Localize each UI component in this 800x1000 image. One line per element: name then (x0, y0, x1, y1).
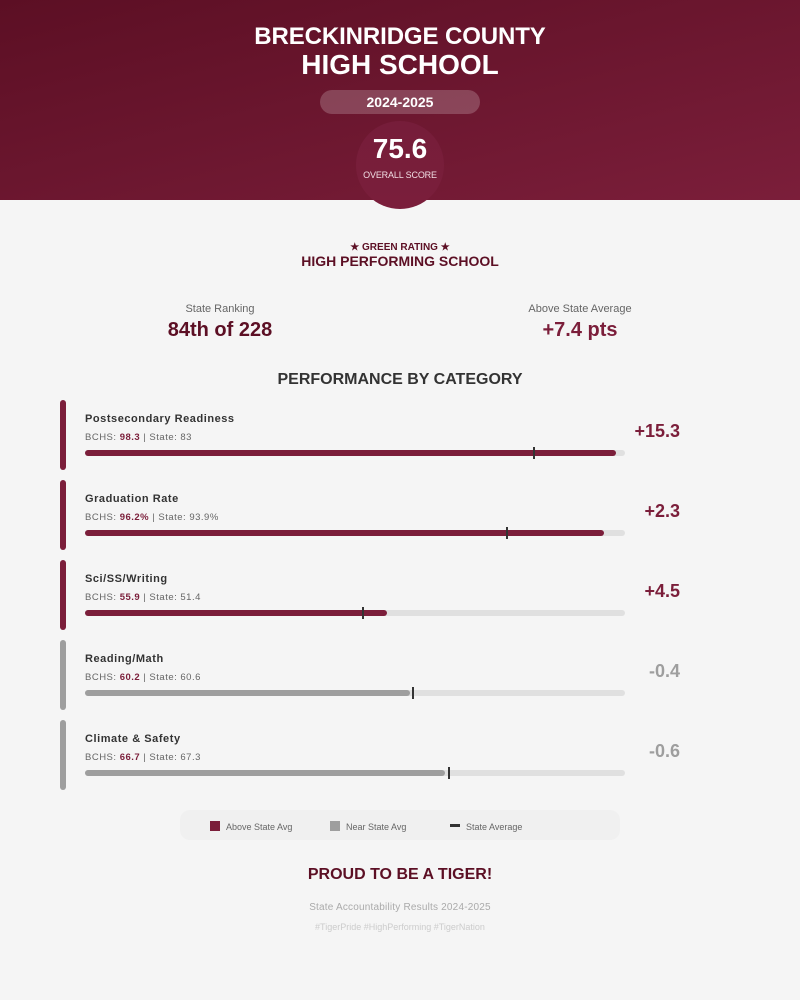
header banner (0, 0, 800, 200)
rating label: ★ GREEN RATING ★ (350, 242, 450, 253)
footer source: State Accountability Results 2024-2025 (309, 902, 491, 913)
category: Sci/SS/Writing: Sci/SS/Writing (85, 573, 168, 585)
category: Postsecondary Readiness: +15.3 (634, 421, 680, 441)
footer hashtags: #TigerPride #HighPerforming #TigerNation (315, 922, 485, 932)
score label: OVERALL SCORE (363, 170, 437, 180)
year badge (320, 90, 480, 114)
category: Graduation Rate: BCHS: 96.2% | State: 93.9% (85, 512, 219, 523)
section heading: PERFORMANCE BY CATEGORY (277, 371, 523, 388)
rating heading: HIGH PERFORMING SCHOOL (301, 253, 499, 269)
average label: Above State Average (528, 303, 632, 315)
category: Sci/SS/Writing (60, 560, 680, 630)
closing slogan: PROUD TO BE A TIGER! (308, 866, 492, 883)
average value: +7.4 pts (542, 319, 618, 341)
category: Postsecondary Readiness (60, 400, 680, 470)
overall score circle (356, 121, 444, 209)
category: Sci/SS/Writing: +4.5 (644, 581, 680, 601)
year badge: 2024-2025 (367, 94, 433, 110)
category: Graduation Rate: +2.3 (644, 501, 680, 521)
category: Climate & Safety: BCHS: 66.7 | State: 67.3 (85, 752, 201, 763)
category: Reading/Math: -0.4 (649, 661, 680, 681)
legend: near state avg: Near State Avg (346, 822, 406, 832)
category: Reading/Math: BCHS: 60.2 | State: 60.6 (85, 672, 201, 683)
category: Postsecondary Readiness: BCHS: 98.3 | State: 83 (85, 432, 192, 443)
category: Climate & Safety: Climate & Safety (85, 733, 181, 745)
category: Reading/Math: Reading/Math (85, 653, 164, 665)
category: Postsecondary Readiness: Postsecondary Readiness (85, 413, 235, 425)
stat: above state average (528, 303, 632, 341)
category: Climate & Safety: -0.6 (649, 741, 680, 761)
ranking label: State Ranking (185, 303, 255, 315)
ranking value: 84th of 228 (168, 319, 272, 341)
title line 1: BRECKINRIDGE COUNTY (254, 23, 546, 50)
score value: 75.6 (373, 133, 427, 164)
legend: above state avg: Above State Avg (226, 822, 292, 832)
legend panel (180, 810, 620, 840)
category: Climate & Safety (60, 720, 680, 790)
title line 2: HIGH SCHOOL (301, 49, 499, 80)
category: Graduation Rate: Graduation Rate (85, 493, 179, 505)
category: Sci/SS/Writing: BCHS: 55.9 | State: 51.4 (85, 592, 201, 603)
category: Graduation Rate (60, 480, 680, 550)
category: Reading/Math (60, 640, 680, 710)
stat: state ranking (168, 303, 272, 341)
legend: state average: State Average (466, 822, 522, 832)
